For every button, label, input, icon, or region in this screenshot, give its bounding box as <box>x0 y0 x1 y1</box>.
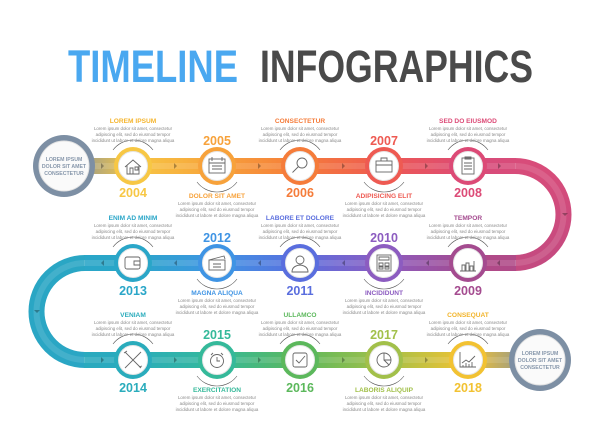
node 2017: 2017 <box>370 328 398 342</box>
node 2018: CONSEQUAT <box>447 312 489 319</box>
timeline track <box>36 166 563 360</box>
node 2012: MAGNA ALIQUA <box>191 290 243 297</box>
node 2012 <box>176 231 259 315</box>
node 2016: adipiscing elit, sed do eiusmod tempor <box>263 326 338 331</box>
node 2018 <box>427 312 510 395</box>
node 2006: Lorem ipsum dolor sit amet, consectetur <box>261 126 340 131</box>
node 2006: CONSECTETUR <box>275 118 325 125</box>
node 2015: Lorem ipsum dolor sit amet, consectetur <box>178 395 257 400</box>
node 2005: Lorem ipsum dolor sit amet, consectetur <box>178 201 257 206</box>
node 2010: INCIDIDUNT <box>365 290 403 297</box>
node 2016 <box>259 312 342 395</box>
node 2010: adipiscing elit, sed do eiusmod tempor <box>347 304 422 309</box>
node 2010: 2010 <box>370 231 398 245</box>
title: INFOGRAPHICS <box>260 41 533 92</box>
node 2014: incididunt ut labore et dolore magna aliqua <box>92 332 175 337</box>
start circle: CONSECTETUR <box>44 171 84 177</box>
node 2008: incididunt ut labore et dolore magna aliqua <box>427 138 510 143</box>
node 2013: adipiscing elit, sed do eiusmod tempor <box>96 229 171 234</box>
node 2018: Lorem ipsum dolor sit amet, consectetur <box>429 320 508 325</box>
node 2014: adipiscing elit, sed do eiusmod tempor <box>96 326 171 331</box>
node 2006: 2006 <box>286 186 314 200</box>
title <box>68 41 533 92</box>
node 2008: SED DO EIUSMOD <box>439 118 497 125</box>
end circle: DOLOR SIT AMET <box>518 358 563 364</box>
node 2009: Lorem ipsum dolor sit amet, consectetur <box>429 223 508 228</box>
node 2016: incididunt ut labore et dolore magna aliqua <box>259 332 342 337</box>
node 2014: 2014 <box>119 381 147 395</box>
node 2012: incididunt ut labore et dolore magna aliqua <box>176 310 259 315</box>
node 2017: Lorem ipsum dolor sit amet, consectetur <box>345 395 424 400</box>
node 2005 <box>176 134 259 218</box>
node 2018: incididunt ut labore et dolore magna aliqua <box>427 332 510 337</box>
arrows on track <box>34 163 568 363</box>
node 2007: Lorem ipsum dolor sit amet, consectetur <box>345 201 424 206</box>
node 2009: 2009 <box>454 284 482 298</box>
node 2015: adipiscing elit, sed do eiusmod tempor <box>180 401 255 406</box>
node 2016: 2016 <box>286 381 314 395</box>
node 2010: incididunt ut labore et dolore magna aliqua <box>343 310 426 315</box>
node 2011: adipiscing elit, sed do eiusmod tempor <box>263 229 338 234</box>
node 2004: Lorem ipsum dolor sit amet, consectetur <box>94 126 173 131</box>
node 2006 <box>259 118 342 200</box>
node 2009: incididunt ut labore et dolore magna aliqua <box>427 235 510 240</box>
node 2016: ULLAMCO <box>284 312 316 319</box>
node 2007: adipiscing elit, sed do eiusmod tempor <box>347 207 422 212</box>
node 2016: Lorem ipsum dolor sit amet, consectetur <box>261 320 340 325</box>
node 2018: 2018 <box>454 381 482 395</box>
node 2009: TEMPOR <box>454 215 482 222</box>
node 2011: incididunt ut labore et dolore magna aliqua <box>259 235 342 240</box>
node 2005: 2005 <box>203 134 231 148</box>
node 2013: 2013 <box>119 284 147 298</box>
node 2010 <box>343 231 426 315</box>
node 2015: EXERCITATION <box>193 387 241 394</box>
node 2013: incididunt ut labore et dolore magna aliqua <box>92 235 175 240</box>
node 2007 <box>343 134 426 218</box>
end circle: CONSECTETUR <box>520 365 560 371</box>
node 2015: incididunt ut labore et dolore magna aliqua <box>176 407 259 412</box>
title: TIMELINE <box>68 41 238 92</box>
node 2008: 2008 <box>454 186 482 200</box>
node 2008: Lorem ipsum dolor sit amet, consectetur <box>429 126 508 131</box>
node 2013 <box>92 215 175 298</box>
node 2014: VENIAM <box>120 312 146 319</box>
node 2011: 2011 <box>286 284 314 298</box>
node 2004: adipiscing elit, sed do eiusmod tempor <box>96 132 171 137</box>
node 2015 <box>176 328 259 412</box>
node 2004 <box>92 118 175 200</box>
node 2013: ENIM AD MINIM <box>109 215 158 222</box>
end circle: LOREM IPSUM <box>522 351 558 357</box>
node 2017: adipiscing elit, sed do eiusmod tempor <box>347 401 422 406</box>
node 2004: LOREM IPSUM <box>110 118 157 125</box>
node 2012: Lorem ipsum dolor sit amet, consectetur <box>178 298 257 303</box>
node 2018: adipiscing elit, sed do eiusmod tempor <box>431 326 506 331</box>
node 2014 <box>92 312 175 395</box>
node 2012: adipiscing elit, sed do eiusmod tempor <box>180 304 255 309</box>
node 2004: incididunt ut labore et dolore magna aliqua <box>92 138 175 143</box>
node 2015: 2015 <box>203 328 231 342</box>
node 2005: DOLOR SIT AMET <box>189 193 245 200</box>
node 2007: 2007 <box>370 134 398 148</box>
start circle <box>33 135 95 197</box>
node 2017 <box>343 328 426 412</box>
start circle: DOLOR SIT AMET <box>42 164 87 170</box>
node 2011: Lorem ipsum dolor sit amet, consectetur <box>261 223 340 228</box>
node 2006: adipiscing elit, sed do eiusmod tempor <box>263 132 338 137</box>
start circle: LOREM IPSUM <box>46 157 82 163</box>
node 2010: Lorem ipsum dolor sit amet, consectetur <box>345 298 424 303</box>
node 2013: Lorem ipsum dolor sit amet, consectetur <box>94 223 173 228</box>
node 2004: 2004 <box>119 186 147 200</box>
end circle <box>509 329 571 391</box>
node 2012: 2012 <box>203 231 231 245</box>
node 2007: incididunt ut labore et dolore magna aliqua <box>343 213 426 218</box>
node 2008: adipiscing elit, sed do eiusmod tempor <box>431 132 506 137</box>
node 2005: adipiscing elit, sed do eiusmod tempor <box>180 207 255 212</box>
node 2009: adipiscing elit, sed do eiusmod tempor <box>431 229 506 234</box>
node 2006: incididunt ut labore et dolore magna aliqua <box>259 138 342 143</box>
node 2017: incididunt ut labore et dolore magna aliqua <box>343 407 426 412</box>
node 2005: incididunt ut labore et dolore magna aliqua <box>176 213 259 218</box>
node 2011: LABORE ET DOLORE <box>266 215 335 222</box>
node 2009 <box>427 215 510 298</box>
node 2007: ADIPISICING ELIT <box>356 193 412 200</box>
node 2017: LABORIS ALIQUIP <box>355 387 414 394</box>
node 2011 <box>259 215 342 298</box>
node 2014: Lorem ipsum dolor sit amet, consectetur <box>94 320 173 325</box>
node 2008 <box>427 118 510 200</box>
